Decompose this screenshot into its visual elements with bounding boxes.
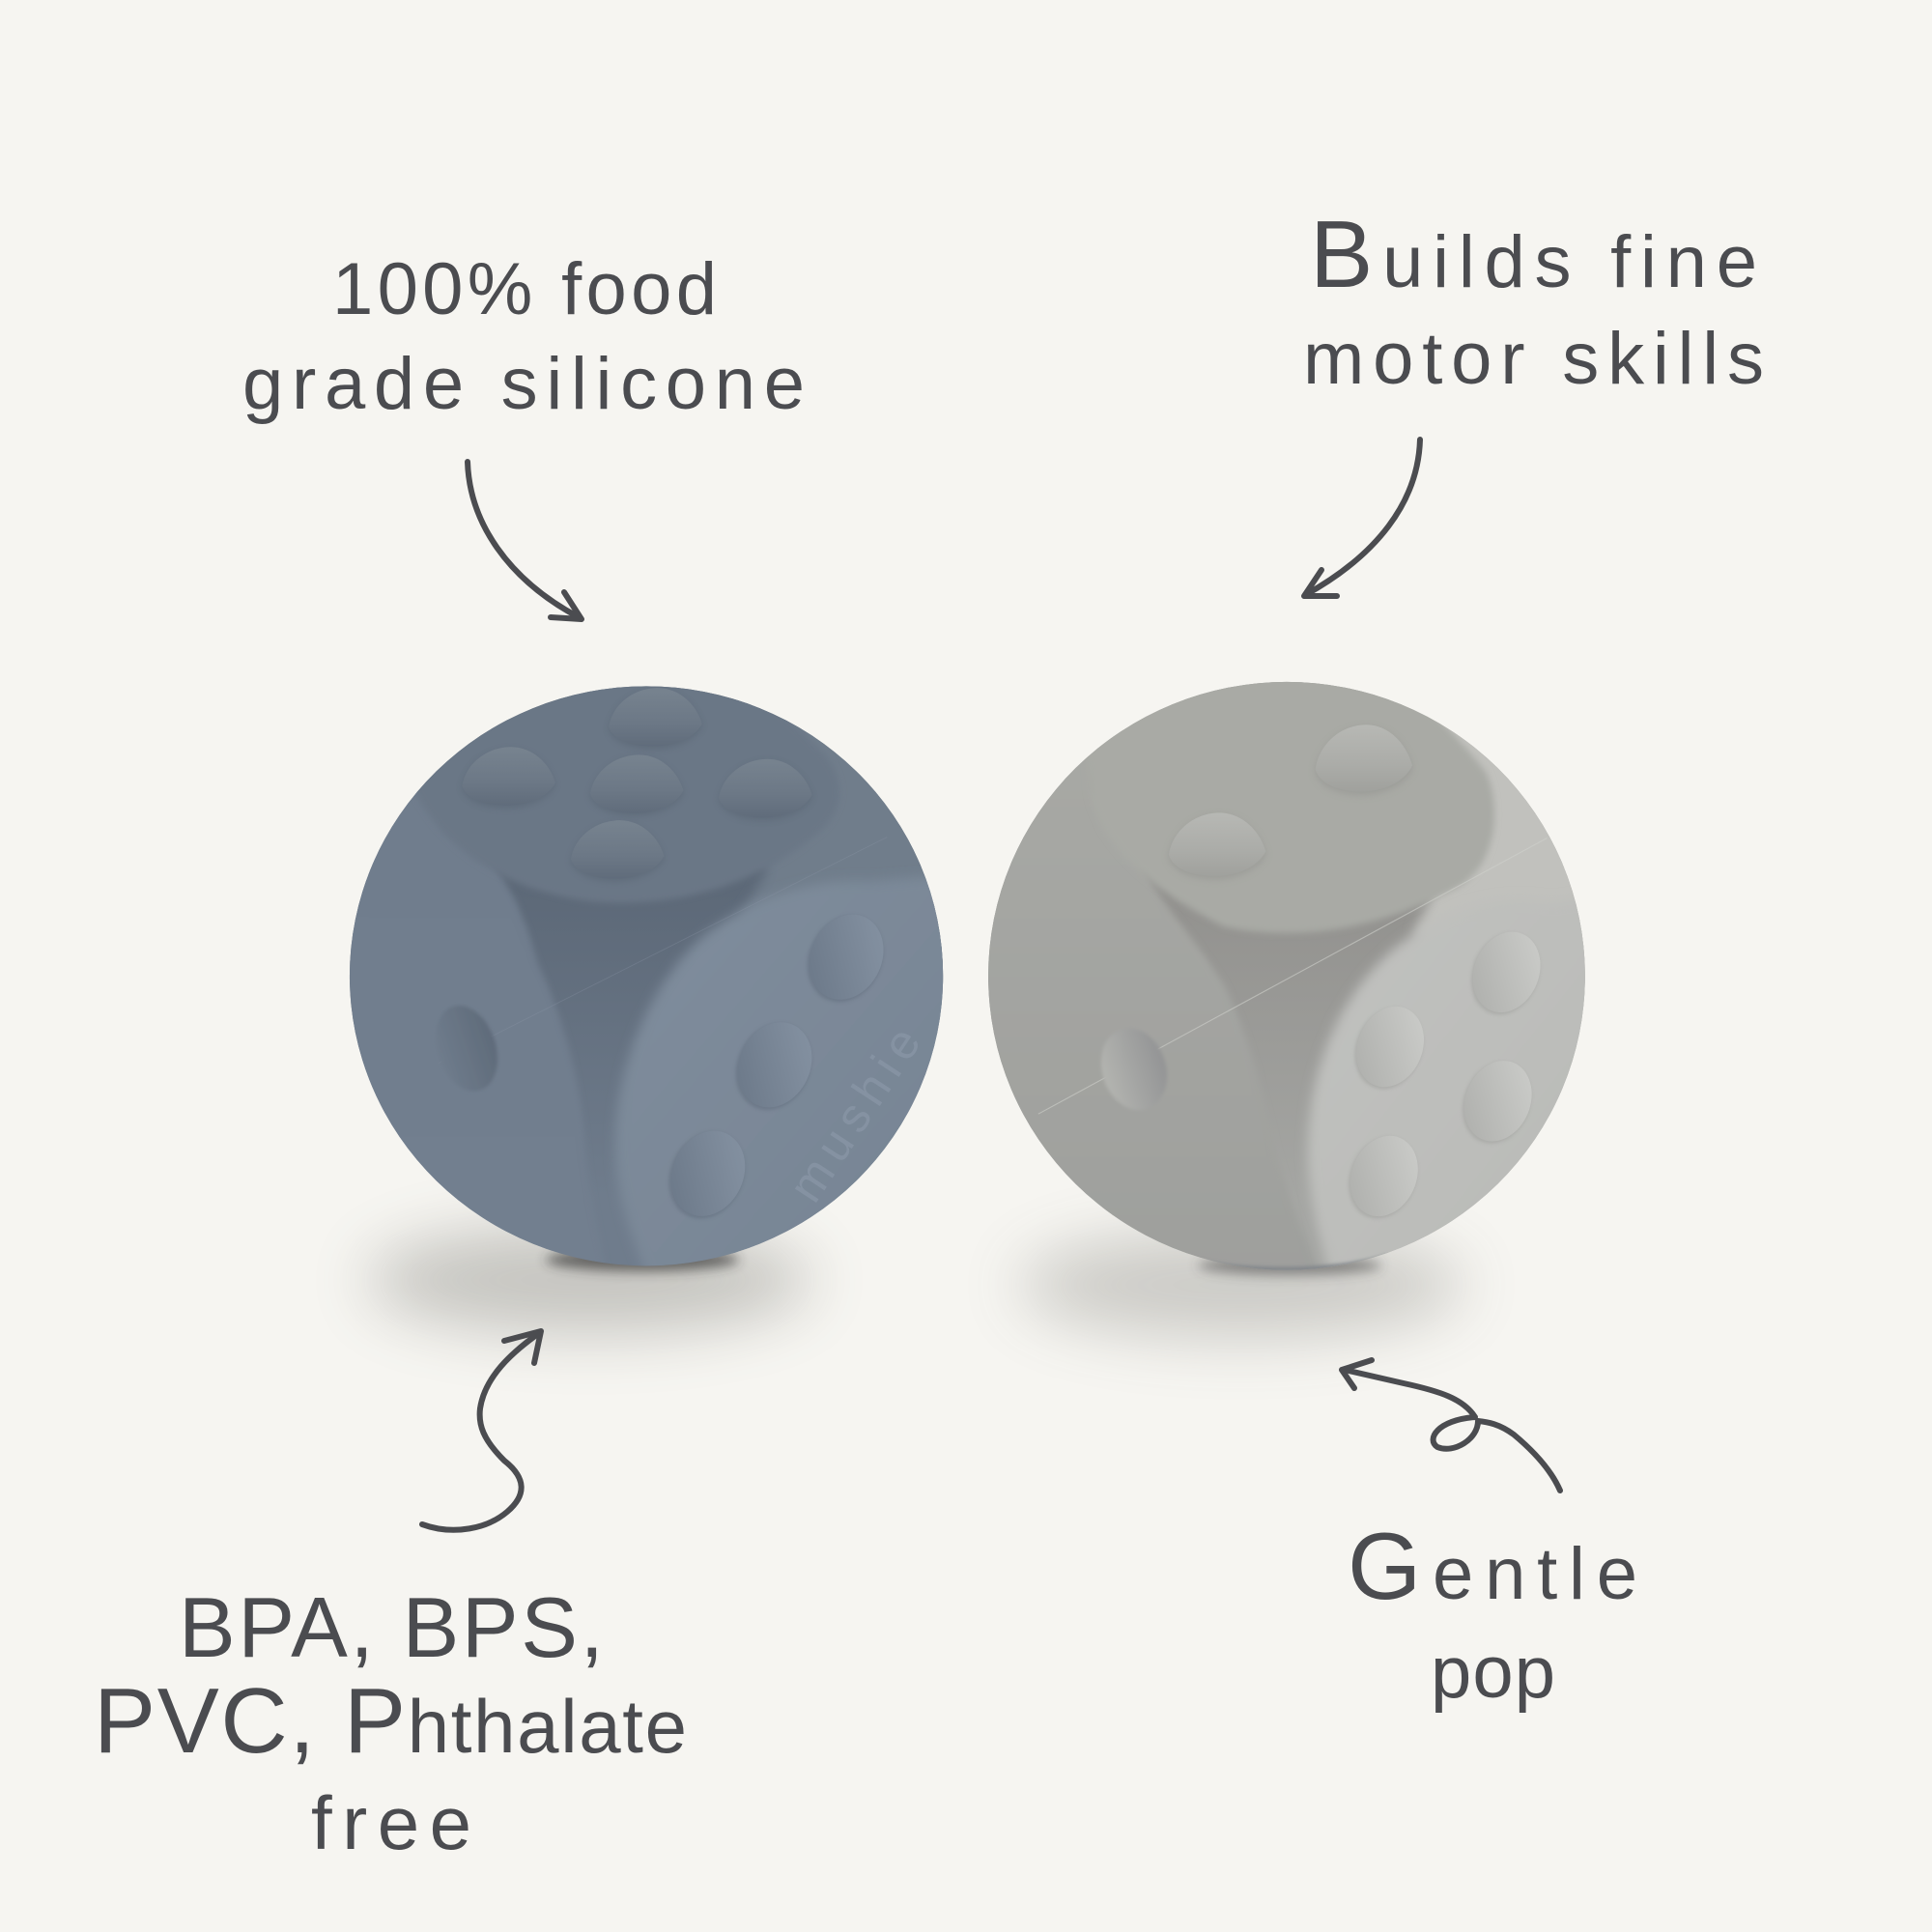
pip: one on left [441, 1007, 498, 1090]
grey die [988, 682, 1585, 1269]
label: BPA, BPS, PVC, Phthalate free: PVC, Phthalate [94, 1669, 687, 1773]
label: Gentle pop: pop [1431, 1632, 1555, 1714]
label: 100% food grade silicone: 100% food [332, 248, 717, 330]
pips: four on right [1337, 922, 1552, 1229]
label: BPA, BPS, PVC, Phthalate free: free [311, 1780, 471, 1865]
label: Builds fine motor skills: motor skills [1303, 318, 1764, 400]
shadow: grey die [1019, 1232, 1463, 1338]
blue die [350, 686, 943, 1265]
label: Builds fine motor skills [1303, 201, 1764, 400]
label: BPA, BPS, PVC, Phthalate free: BPA, BPS, [179, 1579, 604, 1675]
label: BPA, BPS, PVC, Phthalate free [94, 1579, 687, 1865]
pips: three on right [655, 902, 897, 1231]
seam line [1038, 838, 1548, 1114]
brand mark: mushie [779, 1017, 931, 1211]
arrow: motor skills label to grey die [1304, 440, 1420, 596]
shadow: blue die [367, 1227, 811, 1333]
pips: five on top [462, 688, 812, 882]
arrow: Gentle pop label to grey die [1342, 1360, 1560, 1491]
label: 100% food grade silicone: grade silicone [242, 343, 805, 425]
arrow: silicone label to blue die [468, 462, 582, 619]
arrow: BPA label to blue die [422, 1331, 541, 1530]
label: Builds fine motor skills: Builds fine [1310, 201, 1757, 307]
label: Gentle pop [1348, 1513, 1637, 1714]
label: 100% food grade silicone [242, 248, 805, 425]
label: Gentle pop: Gentle [1348, 1513, 1637, 1619]
seam line [496, 837, 887, 1035]
pip: one on left [1101, 1034, 1167, 1107]
pips: two on top [1169, 724, 1412, 879]
infographic canvas [100, 221, 1762, 1850]
